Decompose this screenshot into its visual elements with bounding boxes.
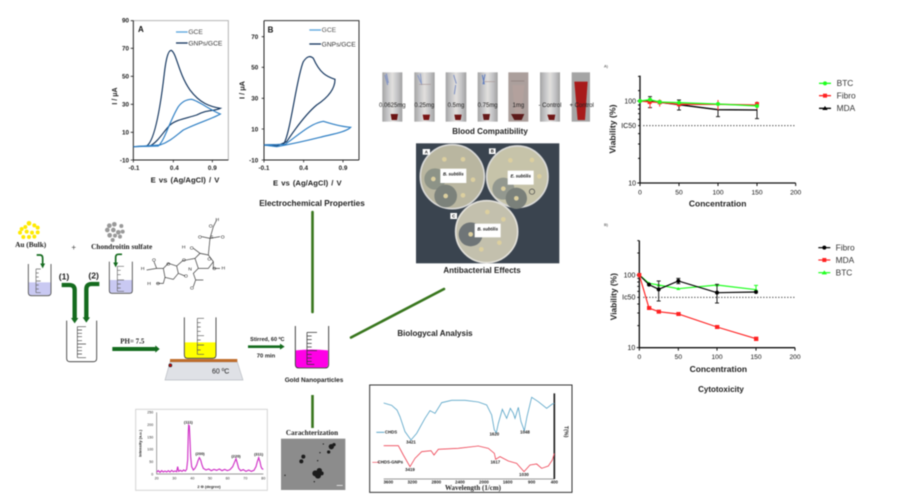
chart: XRD pattern	[136, 409, 267, 490]
hot plate	[165, 359, 243, 380]
chart: FTIR spectra: 1617	[491, 460, 501, 465]
connector: electrochemical to nanoparticles	[311, 212, 314, 312]
chart B: cyclic voltammetry: 50	[251, 65, 259, 72]
chart: XRD pattern: 0	[151, 472, 153, 476]
arrow: stirring step: 70 min	[257, 353, 276, 359]
chart A: cyclic voltammetry: 30	[122, 102, 129, 109]
chart B: cytotoxicity viability: MDA	[836, 255, 855, 265]
chart B: cytotoxicity viability: 0	[637, 354, 641, 361]
labels: (1) (2)	[59, 271, 99, 282]
chart: XRD pattern: (311)	[254, 451, 264, 456]
molecule: chondroitin sulfate structure: H	[141, 266, 145, 272]
blood compatibility tubes: 0.75mg	[478, 103, 498, 109]
chart B: cytotoxicity viability: Fibro	[836, 242, 855, 252]
chart: XRD pattern: 40	[190, 476, 194, 480]
chart B: cyclic voltammetry: -0.1	[259, 165, 270, 172]
chart A: cyclic voltammetry	[120, 18, 228, 184]
molecule: chondroitin sulfate structure: O	[190, 285, 194, 291]
molecule: chondroitin sulfate structure: O	[212, 266, 216, 272]
molecule: chondroitin sulfate structure: O	[156, 281, 160, 287]
chart B: cyclic voltammetry: 30	[251, 96, 259, 103]
chart A: viability: BTC	[837, 78, 853, 88]
chart: XRD pattern: (200)	[195, 451, 205, 456]
chart: FTIR spectra: 3421	[406, 440, 416, 445]
chart B: cyclic voltammetry: 0.4	[299, 165, 309, 172]
chart: XRD pattern: 80	[261, 476, 265, 480]
chart A: viability: 150	[751, 189, 763, 196]
chart A: viability	[604, 64, 856, 208]
antibacterial plates photo: B. subtilis	[477, 226, 499, 231]
antibacterial plates photo: B	[491, 149, 494, 154]
chart: FTIR spectra: 1600	[503, 480, 513, 485]
chart B: cytotoxicity viability: 100	[624, 272, 635, 279]
chart: FTIR spectra: 3600	[384, 480, 394, 485]
arrow: stirring step: Stirred, 60 ºC	[250, 337, 285, 343]
chart B: cyclic voltammetry	[238, 21, 359, 188]
chart B: cytotoxicity viability: 150	[750, 354, 762, 361]
blood compatibility tubes: 0.25mg	[414, 103, 434, 109]
blood compatibility tubes: 1mg	[513, 103, 524, 109]
arrow (2)	[86, 284, 99, 318]
chart: FTIR spectra: 2000	[479, 480, 489, 485]
chart: XRD pattern: 50	[208, 476, 212, 480]
chart: FTIR spectra: Wavelength (1/cm)	[445, 484, 502, 492]
chart B: cytotoxicity viability: 10	[628, 345, 635, 352]
beaker: yellow solution on hot plate	[184, 317, 216, 358]
chart A: viability: 10	[628, 180, 636, 187]
beaker: mixing	[67, 321, 97, 362]
chart B: cyclic voltammetry: 10	[251, 126, 259, 133]
molecule: chondroitin sulfate structure: S	[210, 235, 214, 241]
blood compatibility tubes: + Control	[569, 103, 594, 109]
chart B: cyclic voltammetry: 70	[251, 34, 259, 41]
chart B: cytotoxicity viability: 50	[675, 354, 682, 361]
heading: Electrochemical Properties: Electrochemical Properties	[259, 199, 365, 208]
chart B: cytotoxicity viability	[608, 241, 855, 374]
chart A: cyclic voltammetry: -0.1	[129, 165, 140, 172]
chart A: cyclic voltammetry: 0.4	[170, 165, 179, 172]
molecule: chondroitin sulfate structure	[141, 217, 226, 291]
chart: FTIR spectra: 1620	[490, 432, 500, 437]
blood compatibility tubes: 0.0625mg	[379, 103, 406, 109]
connector: biological analysis to nanoparticles	[351, 289, 444, 338]
chart B: cytotoxicity viability: 200	[789, 354, 801, 361]
chart: FTIR spectra	[370, 385, 572, 492]
antibacterial plates photo: E. subtilis	[510, 174, 531, 179]
heading: Cytotoxicity: Cytotoxicity	[698, 385, 744, 394]
chart: XRD pattern: 2 Θ (degree)	[197, 484, 221, 489]
label: Chondroitin sulfate: Chondroitin sulfate	[91, 242, 153, 251]
molecule: chondroitin sulfate structure: O	[152, 257, 156, 263]
chart A: cyclic voltammetry: 0.9	[208, 165, 217, 172]
chart: FTIR spectra: 2400	[455, 480, 465, 485]
molecule: chondroitin sulfate structure: O	[207, 257, 211, 263]
molecule: chondroitin sulfate structure: N	[188, 266, 192, 272]
blood compatibility tubes: 0.5mg	[448, 103, 464, 109]
chart A: viability: Viability (%)	[608, 104, 618, 153]
chart A: cyclic voltammetry: 10	[122, 130, 129, 137]
synthesis scheme	[15, 221, 243, 380]
chart: FTIR spectra: 900	[528, 480, 536, 485]
label: panel B): B)	[604, 222, 609, 227]
molecule: chondroitin sulfate structure: H	[182, 245, 186, 251]
chart A: viability: 50	[675, 189, 683, 196]
chart: FTIR spectra: 3419	[405, 467, 415, 472]
arrow: stirring step	[248, 337, 285, 359]
chart B: cyclic voltammetry: GCE	[322, 27, 337, 34]
chart: XRD pattern: 50	[149, 460, 153, 464]
chart A: viability: 100	[712, 189, 724, 196]
molecule: chondroitin sulfate structure: O	[221, 235, 225, 241]
icon: chondroitin particles	[105, 222, 125, 242]
chart B: cytotoxicity viability: Viability (%)	[608, 273, 618, 320]
chart: FTIR spectra: T(%)	[562, 426, 568, 438]
y axis label: I / μA (chart A): I / μA	[112, 87, 119, 105]
chart A: cyclic voltammetry: 90	[122, 18, 129, 25]
chart B: cyclic voltammetry: B	[268, 26, 274, 35]
chart: FTIR spectra: 1048	[520, 430, 530, 435]
molecule: chondroitin sulfate structure: O	[166, 261, 170, 267]
molecule: chondroitin sulfate structure: O	[182, 257, 186, 263]
chart B: cyclic voltammetry: -10	[249, 157, 259, 164]
connector: characterization to nanoparticles	[311, 395, 314, 428]
plus sign: +	[71, 243, 76, 252]
chart A: viability: 0	[638, 189, 642, 196]
chart A: cyclic voltammetry: GCE	[188, 29, 203, 36]
label: Gold Nanoparticles: Gold Nanoparticles	[285, 377, 344, 384]
molecule: chondroitin sulfate structure: O	[184, 273, 188, 279]
blood compatibility tubes	[379, 72, 594, 122]
antibacterial plates photo	[416, 143, 559, 263]
antibacterial plates photo: A	[425, 149, 429, 154]
chart B: cytotoxicity viability: Concentration	[690, 364, 747, 374]
chart A: cyclic voltammetry: 50	[122, 74, 129, 81]
chart: FTIR spectra: 2800	[432, 480, 442, 485]
arrowhead (1)	[71, 318, 78, 323]
arrow: pH step	[112, 345, 160, 353]
chart B: cytotoxicity viability: Ic50	[622, 295, 635, 302]
arrow (1)	[62, 285, 75, 318]
beaker: chondroitin solution	[109, 254, 132, 293]
chart: FTIR spectra: 3200	[408, 480, 418, 485]
label: pH: PH= 7.5	[120, 338, 145, 346]
chart: FTIR spectra: 1030	[519, 472, 529, 477]
chart: XRD pattern: 70	[243, 476, 247, 480]
chart A: cyclic voltammetry: E vs (Ag/AgCl) / V	[151, 175, 220, 184]
chart B: cytotoxicity viability: 100	[711, 354, 723, 361]
labels: (1) (2): (1)	[59, 272, 69, 282]
hot plate: 60 ºC	[212, 369, 229, 376]
chart: XRD pattern: (111)	[184, 420, 193, 425]
label: Au (Bulk): Au (Bulk)	[15, 240, 47, 249]
heading: Blood Compatibility: Blood Compatibility	[452, 127, 528, 136]
chart B: cyclic voltammetry: 0.9	[339, 165, 348, 172]
chart: XRD pattern: 200	[147, 423, 153, 427]
chart: XRD pattern: 30	[172, 476, 176, 480]
molecule: chondroitin sulfate structure: O	[209, 223, 213, 229]
chart A: cyclic voltammetry: A	[138, 25, 144, 34]
chart A: viability: Concentration	[689, 198, 746, 208]
chart B: cyclic voltammetry: GNPs/GCE	[322, 42, 356, 49]
chart A: viability: A)	[604, 64, 609, 69]
heading: Biological Analysis: Biologycal Analysis	[397, 329, 473, 338]
chart: XRD pattern: Intensity (a.u.)	[137, 429, 142, 457]
chart: XRD pattern: (220)	[231, 453, 241, 458]
chart B: cyclic voltammetry: I / μA	[238, 80, 247, 99]
heading: Characterization: Carachterization	[286, 429, 338, 437]
antibacterial plates photo: C	[452, 214, 455, 219]
chart A: cyclic voltammetry: 70	[122, 46, 129, 53]
molecule: chondroitin sulfate structure: H	[216, 217, 220, 223]
chart A: viability: MDA	[837, 103, 856, 113]
chart A: cyclic voltammetry: -10	[120, 157, 129, 164]
molecule: chondroitin sulfate structure: H	[147, 281, 151, 287]
molecule: chondroitin sulfate structure: O	[190, 245, 194, 251]
chart: FTIR spectra: CHDS	[385, 430, 397, 435]
chart: XRD pattern: 60	[226, 476, 230, 480]
TEM micrograph	[281, 439, 345, 490]
blood compatibility tubes: - Control	[539, 103, 561, 109]
chart A: viability: Fibro	[837, 91, 856, 101]
chart: FTIR spectra: CHDS-GNPs	[378, 460, 404, 465]
chart A: cyclic voltammetry: GNPs/GCE	[188, 40, 223, 47]
chart: XRD pattern: 100	[147, 448, 153, 452]
arrowhead (2)	[83, 317, 90, 323]
molecule: chondroitin sulfate structure: O	[198, 235, 202, 241]
heading: Antibacterial Effects: Antibacterial Effects	[443, 266, 521, 275]
labels: (1) (2): (2)	[88, 271, 99, 281]
chart A: viability: 100	[624, 98, 636, 105]
chart A: viability: IC50	[621, 123, 636, 130]
molecule: chondroitin sulfate structure: H	[222, 266, 226, 272]
chart: XRD pattern: 250	[147, 411, 153, 415]
chart B: cytotoxicity viability: BTC	[836, 267, 852, 277]
icon: gold particles	[18, 221, 40, 239]
chart A: viability: 200	[790, 189, 802, 196]
chart: XRD pattern: 150	[147, 435, 153, 439]
beaker: gold nanoparticles	[295, 326, 329, 368]
antibacterial plates photo: B. subtilis	[443, 172, 464, 177]
chart: XRD pattern: 20	[155, 476, 159, 480]
chart: FTIR spectra: 400	[551, 480, 559, 485]
beaker: gold solution	[28, 255, 51, 296]
chart B: cyclic voltammetry: E vs (Ag/AgCl) / V	[273, 179, 343, 188]
